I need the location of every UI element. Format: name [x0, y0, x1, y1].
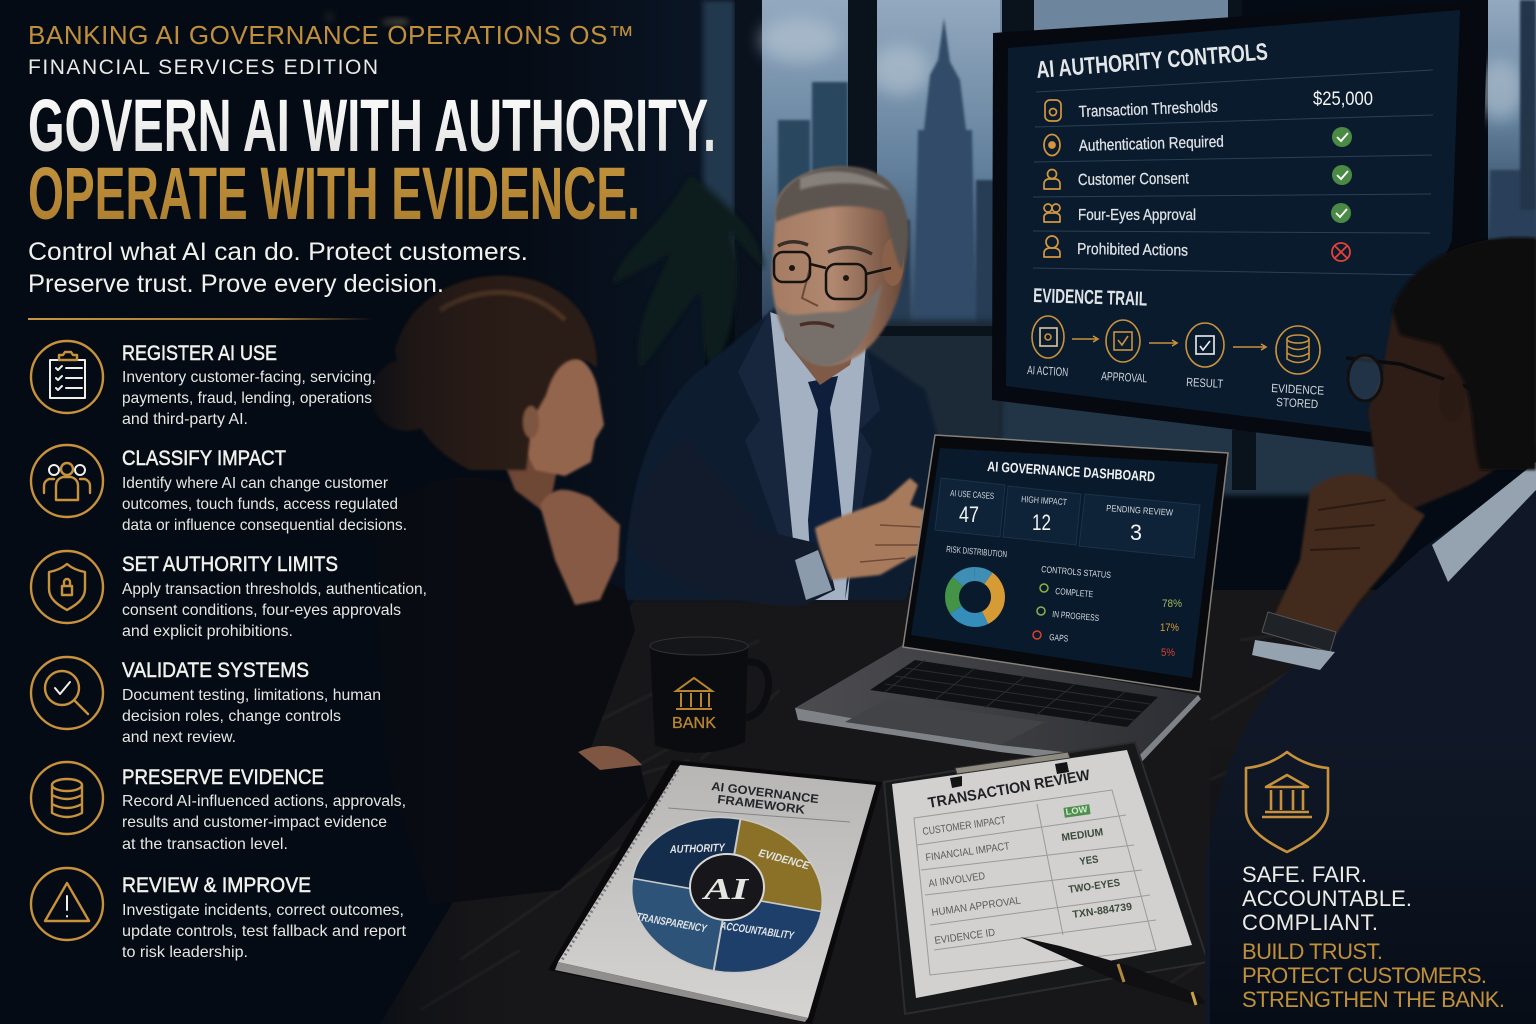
mug label: BANK: [672, 715, 716, 732]
framework wheel: [619, 802, 835, 988]
risk distribution donut: RISK DISTRIBUTION: [946, 544, 1007, 559]
review table lines: [914, 790, 1156, 975]
text: review and improve: [122, 874, 407, 961]
review rows: HUMAN APPROVAL: [931, 895, 1022, 919]
text: set authority limits: and explicit prohibitions.: [122, 623, 293, 640]
text: register AI use: [122, 342, 376, 428]
control rows: Authentication Required: [1079, 134, 1224, 155]
framework wheel: EVIDENCE: [757, 847, 811, 873]
closing statement: BUILD TRUST.: [1242, 939, 1383, 964]
dashboard cards: 3: [1130, 520, 1142, 545]
text: set authority limits: SET AUTHORITY LIMITS: [122, 553, 338, 576]
text: classify impact: outcomes, touch funds, access regulated: [122, 496, 398, 513]
clipboard clamp: [955, 752, 1070, 774]
dashboard cards: HIGH IMPACT: [1021, 494, 1068, 507]
headline: OPERATE WITH EVIDENCE.: [28, 152, 640, 235]
review rows: TWO-EYES: [1068, 877, 1121, 896]
controls status: 78%: [1162, 598, 1182, 610]
evidence trail flow: RESULT: [1186, 375, 1224, 391]
presenter hand and pen: [815, 478, 975, 580]
controls status: [1033, 564, 1182, 659]
closing statement: COMPLIANT.: [1242, 910, 1378, 935]
text: classify impact: data or influence consequential decisions.: [122, 517, 407, 534]
binder title: AI GOVERNANCE: [711, 779, 820, 806]
icon: magnifier check: [31, 657, 103, 729]
eyebrow: BANKING AI GOVERNANCE OPERATIONS OS™: [28, 20, 634, 50]
woman hair: [371, 276, 597, 470]
dashboard cards: PENDING REVIEW: [1106, 503, 1174, 518]
eyebrow: [28, 20, 634, 79]
woman neck: [495, 440, 560, 515]
step: register AI use: [31, 341, 376, 428]
presenter arm and sleeve: [630, 440, 835, 606]
status checks: [1331, 127, 1352, 261]
right colleague head: [1346, 237, 1536, 510]
dashboard cards: AI USE CASES: [950, 488, 994, 501]
control rows: Customer Consent: [1078, 170, 1190, 189]
text: register AI use: payments, fraud, lending, operations: [122, 390, 372, 407]
text: preserve evidence: at the transaction level.: [122, 836, 288, 853]
subheadline: Preserve trust. Prove every decision.: [28, 270, 444, 298]
closing statement: ACCOUNTABLE.: [1242, 886, 1412, 911]
evidence trail heading: EVIDENCE TRAIL: [1033, 285, 1147, 311]
eyebrow: FINANCIAL SERVICES EDITION: [28, 56, 378, 79]
dashboard cards: 12: [1032, 510, 1051, 535]
woman jacket: [372, 477, 648, 905]
text: set authority limits: [122, 553, 427, 640]
icon: warning triangle: [31, 868, 103, 940]
monitor bezel: [992, 0, 1488, 450]
control rows: Prohibited Actions: [1077, 241, 1188, 260]
framework wheel: AI: [701, 871, 749, 906]
evidence trail flow: [1027, 316, 1325, 411]
presenter head: [772, 166, 908, 366]
controls status: GAPS: [1049, 632, 1069, 644]
text: classify impact: CLASSIFY IMPACT: [122, 447, 286, 470]
control rows: Transaction Thresholds: [1079, 99, 1218, 121]
presenter neck: [780, 300, 860, 385]
text: register AI use: REGISTER AI USE: [122, 342, 277, 365]
icon: shield lock: [31, 551, 103, 623]
plant: [612, 175, 764, 370]
text: validate systems: decision roles, change controls: [122, 708, 341, 725]
text: review and improve: to risk leadership.: [122, 944, 248, 961]
framework wheel: TRANSPARENCY: [635, 911, 709, 936]
woman sleeve cuff hand: [578, 746, 642, 770]
review rows: YES: [1079, 853, 1099, 868]
text: preserve evidence: PRESERVE EVIDENCE: [122, 766, 324, 789]
review rows: MEDIUM: [1061, 826, 1104, 844]
dashboard cards: [935, 478, 1200, 558]
pen: [1020, 937, 1206, 1005]
text: validate systems: Document testing, limitations, human: [122, 687, 381, 704]
icon: bank shield badge: [1246, 752, 1328, 852]
presenter: [625, 166, 975, 606]
evidence trail flow: AI ACTION: [1027, 363, 1069, 379]
review rows: AI INVOLVED: [928, 870, 986, 890]
colleague woman: [371, 276, 648, 905]
evidence trail flow: EVIDENCE: [1271, 381, 1325, 398]
presenter lapels: [738, 310, 798, 590]
mug bank icon: [676, 678, 712, 709]
right colleague watch: [1262, 612, 1336, 652]
framework binder: [548, 760, 882, 1024]
controls status: COMPLETE: [1055, 586, 1094, 599]
dashboard title: AI GOVERNANCE DASHBOARD: [987, 458, 1155, 485]
text: preserve evidence: [122, 766, 406, 853]
control rows: Four-Eyes Approval: [1078, 207, 1196, 224]
laptop screen: [911, 448, 1218, 678]
window frames: [762, 0, 1256, 490]
city windows: [760, 0, 1536, 495]
laptop: [795, 435, 1228, 768]
control row icons: [1044, 100, 1061, 257]
laptop lid: [903, 435, 1228, 692]
control rows: $25,000: [1313, 89, 1373, 110]
control rows: [1077, 89, 1373, 260]
text: validate systems: and next review.: [122, 729, 236, 746]
presenter shirt: [770, 312, 866, 600]
step: review and improve: [31, 868, 407, 961]
right colleague suit: [1205, 470, 1536, 1024]
laptop keyboard: [870, 660, 1158, 727]
framework wheel: AUTHORITY: [669, 842, 726, 856]
risk distribution donut: [946, 544, 1007, 620]
text: review and improve: REVIEW & IMPROVE: [122, 874, 311, 897]
text: review and improve: Investigate incidents, correct outcomes,: [122, 902, 404, 919]
bottom right fade: [1210, 740, 1536, 1024]
text: preserve evidence: results and customer-impact evidence: [122, 814, 387, 831]
controls status: CONTROLS STATUS: [1041, 564, 1111, 580]
subheadline: Control what AI can do. Protect customers.: [28, 238, 528, 266]
right colleague: [1205, 237, 1536, 1024]
review rows: LOW: [1065, 804, 1089, 817]
right colleague hand: [1270, 474, 1425, 635]
closing statement: PROTECT CUSTOMERS.: [1242, 963, 1487, 988]
woman hand: [540, 490, 620, 605]
text: classify impact: Identify where AI can change customer: [122, 475, 389, 492]
step: set authority limits: [31, 551, 427, 640]
controls status: IN PROGRESS: [1052, 609, 1100, 623]
review rows: CUSTOMER IMPACT: [922, 814, 1007, 838]
step: classify impact: [31, 445, 407, 534]
icon: database: [31, 762, 103, 834]
controls status: 5%: [1161, 647, 1175, 659]
woman face: [520, 354, 604, 476]
text: register AI use: and third-party AI.: [122, 411, 248, 428]
step: validate systems: [31, 657, 381, 746]
left dark fade: [0, 0, 520, 1024]
transaction review clipboard: [884, 742, 1208, 1014]
closing statement: SAFE. FAIR.: [1242, 862, 1367, 887]
controls status: 17%: [1160, 622, 1179, 634]
binder title: FRAMEWORK: [717, 792, 806, 817]
step: preserve evidence: [31, 762, 406, 853]
review rows: TXN-884739: [1072, 901, 1133, 921]
text: set authority limits: Apply transaction thresholds, authentication,: [122, 581, 427, 598]
subheadline: [28, 238, 528, 298]
dashboard cards: 47: [959, 502, 979, 527]
icon: checklist clipboard: [31, 341, 103, 413]
review rows: FINANCIAL IMPACT: [925, 840, 1011, 864]
gold rule: [28, 318, 373, 320]
framework wheel: ACCOUNTABILITY: [719, 920, 796, 942]
review rows: [922, 804, 1133, 947]
text: preserve evidence: Record AI-influenced actions, approvals,: [122, 793, 406, 810]
evidence trail flow: STORED: [1276, 395, 1319, 411]
text: set authority limits: consent conditions, four-eyes approvals: [122, 602, 401, 619]
text: validate systems: [122, 659, 381, 746]
text: classify impact: [122, 447, 407, 534]
mug: [650, 637, 769, 753]
closing statement: STRENGTHEN THE BANK.: [1242, 987, 1505, 1012]
text: review and improve: update controls, test fallback and report: [122, 923, 407, 940]
wall monitor: [992, 0, 1488, 450]
text: validate systems: VALIDATE SYSTEMS: [122, 659, 309, 682]
monitor screen: [1006, 10, 1460, 432]
presenter suit: [625, 308, 947, 600]
headline: [28, 84, 716, 235]
evidence trail flow: APPROVAL: [1101, 369, 1148, 385]
table: [380, 590, 1536, 1024]
headline: GOVERN AI WITH AUTHORITY.: [28, 84, 716, 167]
icon: people: [31, 445, 103, 517]
review rows: EVIDENCE ID: [934, 927, 996, 947]
presenter tie: [808, 376, 842, 590]
closing statement: [1242, 862, 1505, 1012]
laptop base: [795, 645, 1200, 760]
monitor title: AI AUTHORITY CONTROLS: [1035, 38, 1269, 84]
text: register AI use: Inventory customer-facing, servicing,: [122, 369, 376, 386]
binder title: [711, 779, 820, 817]
clipboard heading: TRANSACTION REVIEW: [927, 767, 1092, 812]
